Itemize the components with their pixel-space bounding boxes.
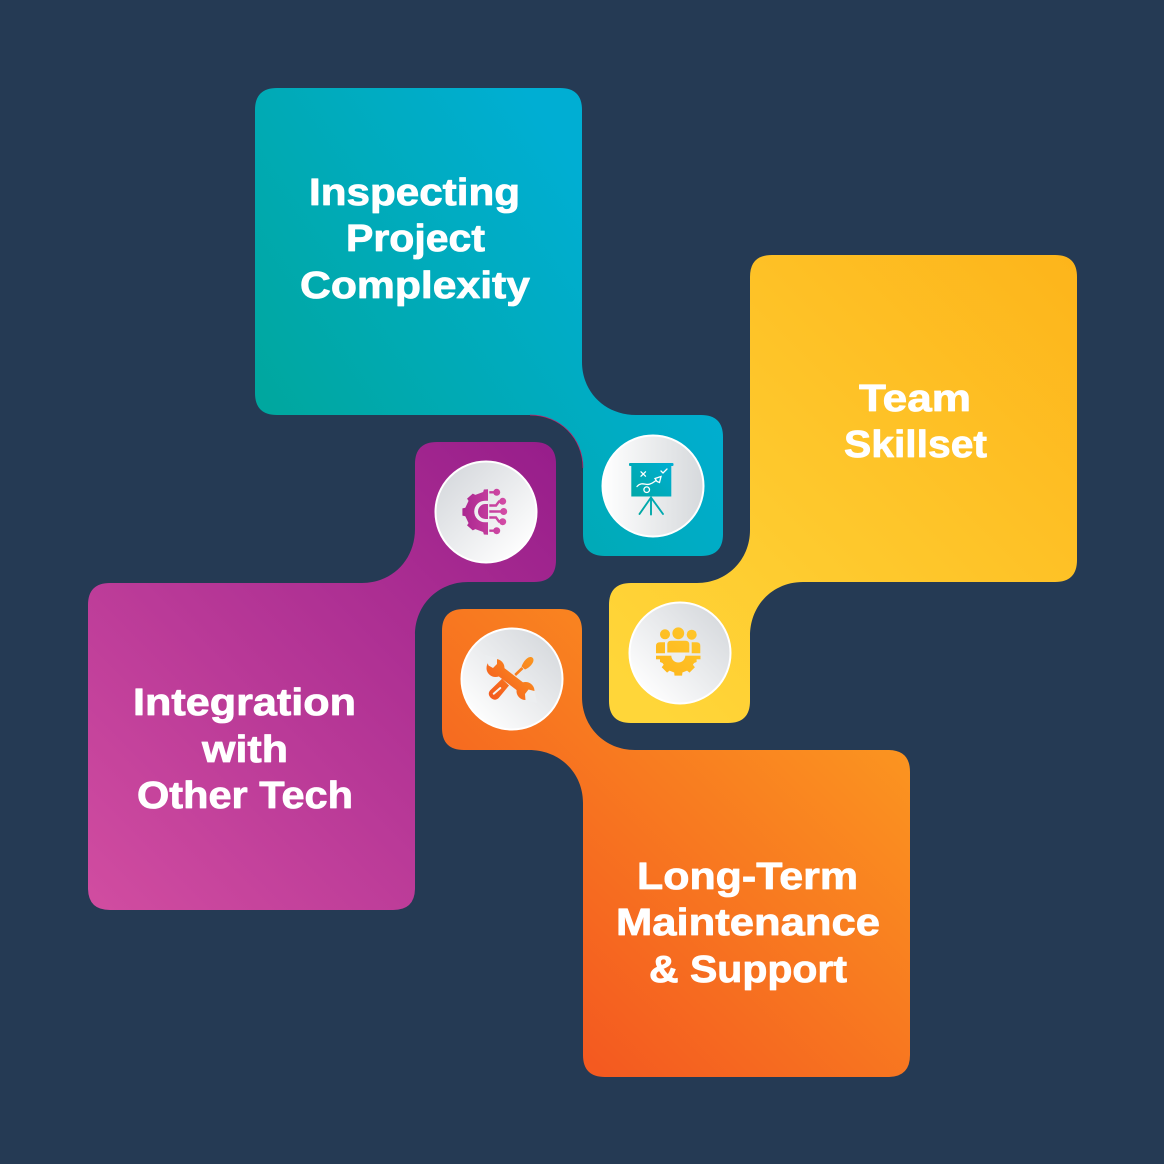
panel: Long-Term Maintenance & Support [442,609,910,1077]
icon: presentation board [602,436,704,536]
orange panel shape [442,609,910,1077]
yellow panel heading: Skillset [844,424,987,466]
thin magenta edge on teal curve [530,415,583,468]
yellow panel heading: Team [859,378,971,420]
icon: wrench and screwdriver [462,628,562,730]
icon: gear with circuit [436,462,536,562]
purple panel shape [88,442,556,910]
teal panel heading: Complexity [300,265,530,307]
orange panel heading: & Support [649,949,847,991]
teal panel heading: Inspecting [309,172,520,214]
orange panel heading: Long-Term [637,856,858,898]
purple panel heading [133,682,356,817]
icon: team with gear [630,602,730,704]
panel: Integration with Other Tech [88,442,556,910]
yellow panel heading [844,378,987,466]
panel: Team Skillset [609,255,1077,723]
orange panel heading: Maintenance [616,902,880,944]
purple panel heading: with [201,729,288,771]
teal panel heading [300,172,530,307]
teal panel shape [255,88,723,556]
purple panel heading: Other Tech [137,775,353,817]
panel: Inspecting Project Complexity [255,88,723,556]
purple panel heading: Integration [133,682,356,724]
yellow panel shape [609,255,1077,723]
teal panel heading: Project [346,218,485,260]
orange panel heading [616,856,880,991]
